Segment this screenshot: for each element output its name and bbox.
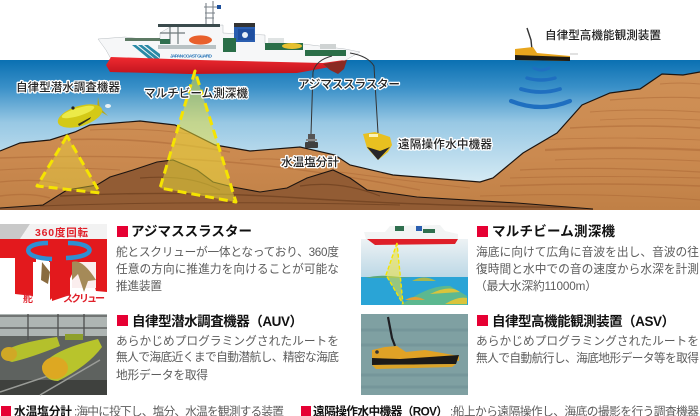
stern propulsor [323, 60, 347, 74]
label: azimuth thruster: アジマススラスター [298, 78, 400, 91]
photo: thruster [0, 224, 107, 305]
description: 海底に向けて広角に音波を出し、音波の往 [476, 245, 699, 259]
AUV vehicle [55, 97, 111, 132]
panel: AUV [0, 313, 339, 395]
hull stripes [132, 45, 160, 59]
ROV [363, 132, 392, 160]
lifeboat [189, 35, 212, 45]
survey ship [98, 1, 360, 74]
hull red [106, 57, 344, 74]
description [116, 334, 339, 382]
red marker [117, 315, 128, 326]
thruster cable [311, 56, 332, 134]
heading: 自律型潜水調査機器（AUV） [132, 313, 303, 329]
ROV tether [350, 53, 378, 133]
note: CTD [1, 404, 284, 416]
rotation arrows [28, 243, 89, 259]
panel: ASV [361, 313, 699, 395]
description: 無人で海底近くまで自動潜航し、精密な海底 [116, 350, 339, 364]
AUV beam [37, 136, 100, 193]
red marker [477, 226, 488, 237]
label: multibeam: マルチビーム測深機 [144, 86, 248, 100]
photo: ASV [361, 314, 468, 395]
panel: azimuth thruster [0, 224, 339, 305]
main seabed survey diagram [0, 1, 700, 210]
description [116, 245, 339, 293]
seabed upper layer [0, 72, 700, 210]
image: multibeam [361, 225, 468, 305]
description: 推進装置 [116, 279, 162, 293]
panel: multibeam [361, 223, 699, 305]
photo: AUV [0, 314, 107, 395]
description [476, 334, 699, 365]
superstructure details [125, 24, 220, 49]
sound waves [511, 68, 570, 107]
label: AUV: 自律型潜水調査機器 [16, 80, 120, 94]
description: あらかじめプログラミングされたルートを [476, 334, 699, 348]
red marker [477, 315, 488, 326]
funnel [234, 23, 255, 42]
deck gear [223, 38, 346, 56]
description: 地形データを取得 [116, 368, 208, 382]
description: 舵とスクリューが一体となっており、360度 [116, 245, 339, 259]
seabed lower layer [0, 160, 600, 210]
mast [204, 1, 221, 24]
description: （最大水深約11000m） [475, 279, 597, 293]
rudder label: 舵 [23, 292, 33, 305]
ship [364, 225, 458, 245]
thruster caption: 360度回転 [35, 226, 88, 239]
beam [386, 243, 403, 304]
description: 任意の方向に推進力を向けることが可能な [116, 262, 339, 276]
note: ROV [301, 404, 699, 416]
red marker [117, 226, 128, 237]
description [475, 245, 699, 293]
label: ROV: 遠隔操作水中機器 [398, 137, 492, 151]
description: あらかじめプログラミングされたルートを [116, 334, 339, 348]
hull white [98, 25, 360, 64]
screw label: スクリュー [63, 293, 105, 305]
description: 復時間と水中での音の速度から水深を計測 [476, 262, 699, 276]
heading: マルチビーム測深機 [492, 223, 616, 239]
ASV [515, 28, 578, 61]
CTD sensor [305, 134, 318, 148]
label: CTD: 水温塩分計 [281, 155, 339, 169]
description: 無人で自動航行し、海底地形データ等を取得 [476, 351, 699, 365]
sea [0, 60, 700, 185]
label: ASV: 自律型高機能観測装置 [545, 28, 661, 42]
multibeam beam [160, 71, 236, 202]
heading: アジマススラスター [131, 224, 252, 239]
ship name: JAPAN COAST GUARD [170, 54, 213, 60]
heading: 自律型高機能観測装置（ASV） [492, 313, 675, 329]
